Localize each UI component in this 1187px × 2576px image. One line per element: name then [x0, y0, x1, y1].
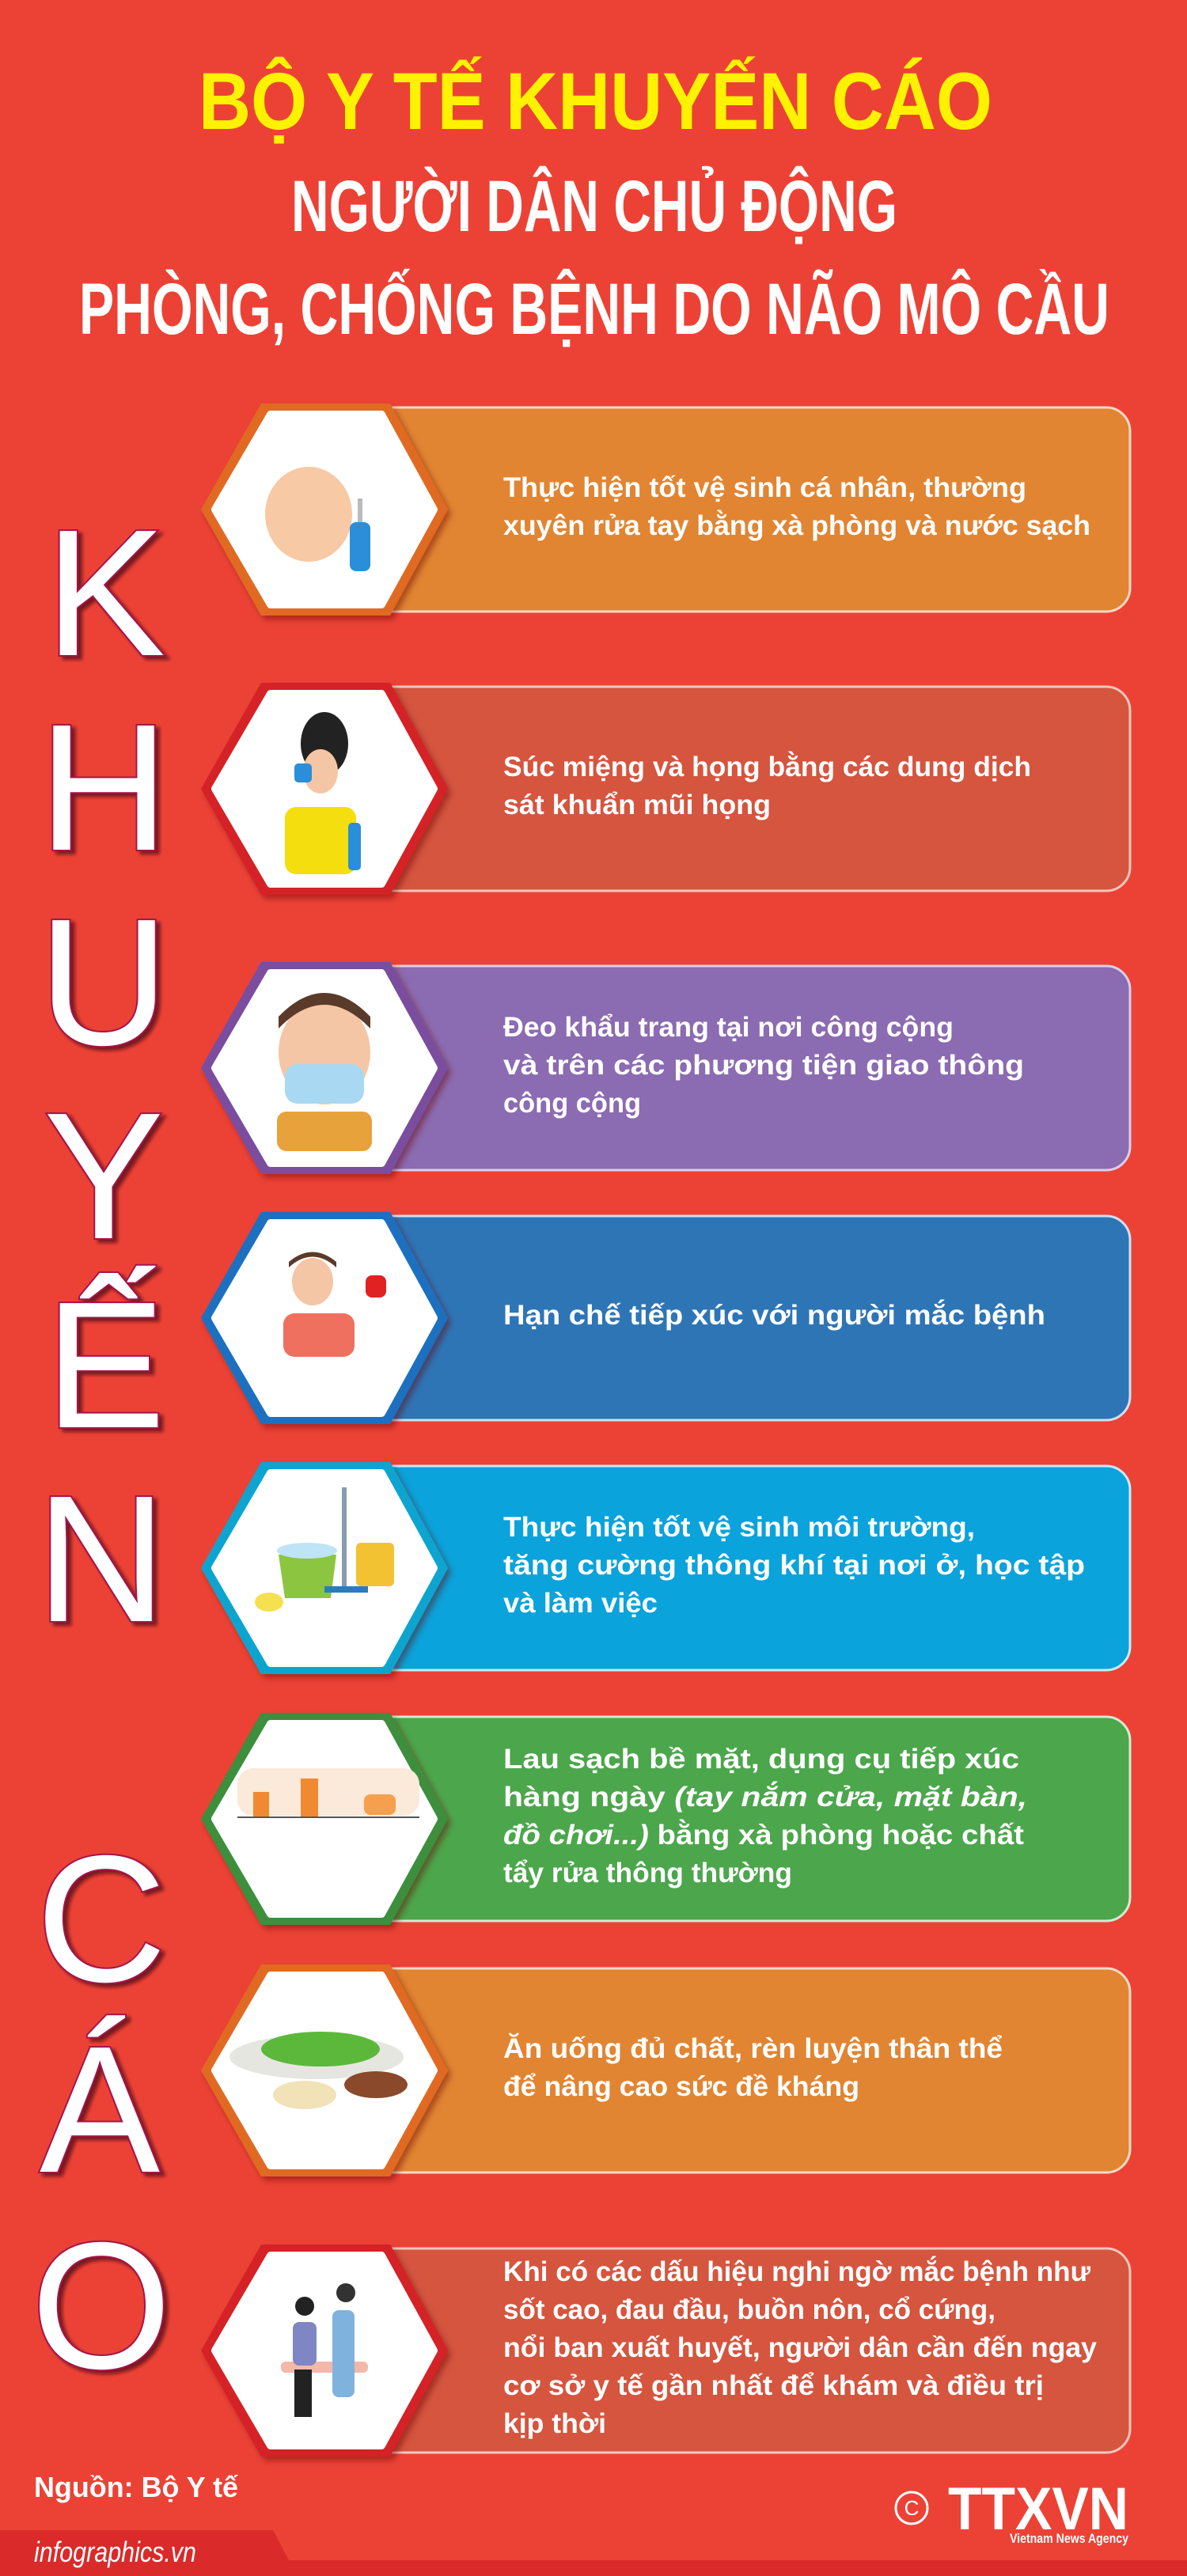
panel 7: nutrition: Ăn uống đủ chất, rèn luyện thân thể	[503, 2033, 1003, 2064]
icon: woman gargling	[201, 683, 448, 895]
vertical word: KHUYẾN CÁO	[31, 493, 172, 2407]
title	[79, 56, 1109, 350]
panel 8: seek medical care	[201, 2245, 1130, 2457]
panel 2: gargle	[201, 683, 1130, 895]
panel 8: seek medical care: sốt cao, đau đầu, buồn nôn, cổ cứng,	[503, 2294, 995, 2325]
panel 8: seek medical care: kịp thời	[503, 2408, 606, 2439]
logo: TTXVN: C	[904, 2496, 919, 2520]
panel 6: clean surfaces: Lau sạch bề mặt, dụng cụ tiếp xúc	[503, 1744, 1019, 1775]
panel 5: environment hygiene	[201, 1462, 1130, 1674]
panel 4: limit contact	[201, 1212, 1130, 1424]
vertical word: KHUYẾN CÁO: N	[36, 1459, 166, 1660]
panel 5: environment hygiene: tăng cường thông khí tại nơi ở, học tập	[503, 1550, 1085, 1581]
panel 1: hand washing: Thực hiện tốt vệ sinh cá nhân, thường	[503, 472, 1026, 503]
vertical word: KHUYẾN CÁO: Ế	[45, 1265, 165, 1466]
panel 6: clean surfaces: tẩy rửa thông thường	[503, 1858, 792, 1888]
logo: TTXVN: TTXVN	[948, 2476, 1128, 2543]
panel 3: mask: công cộng	[503, 1088, 641, 1119]
panel 5: environment hygiene: và làm việc	[503, 1588, 658, 1619]
website: infographics.vn	[34, 2536, 196, 2568]
panel 3: mask: Đeo khẩu trang tại nơi công cộng	[503, 1012, 954, 1043]
icon: food plates	[201, 1964, 448, 2176]
panel 6: clean surfaces	[201, 1713, 1130, 1925]
panel 3: mask: và trên các phương tiện giao thông	[503, 1050, 1024, 1081]
icon: man wearing mask	[201, 962, 448, 1174]
icon: doctor and patient	[201, 2245, 448, 2457]
vertical word: KHUYẾN CÁO: U	[39, 882, 169, 1083]
panel 7: nutrition: để nâng cao sức đề kháng	[503, 2071, 859, 2102]
panel 7: nutrition	[201, 1964, 1130, 2176]
vertical word: KHUYẾN CÁO: Y	[44, 1076, 164, 1277]
vertical word: KHUYẾN CÁO: O	[31, 2206, 172, 2407]
panel 6: clean surfaces: đồ chơi...) bằng xà phòng hoặc chất	[503, 1819, 1024, 1851]
icon: family cleaning	[201, 1713, 448, 1925]
title: BỘ Y TẾ KHUYẾN CÁO	[199, 56, 992, 146]
vertical word: KHUYẾN CÁO: H	[39, 688, 169, 888]
icon: cleaning supplies	[201, 1462, 448, 1674]
panel 1: hand washing: xuyên rửa tay bằng xà phòng và nước sạch	[503, 510, 1090, 541]
icon: sick person and stop hand	[201, 1212, 448, 1424]
vertical word: KHUYẾN CÁO: K	[45, 493, 165, 694]
panel 8: seek medical care: cơ sở y tế gần nhất để khám và điều trị	[503, 2370, 1044, 2401]
panel 8: seek medical care: nổi ban xuất huyết, người dân cần đến ngay	[503, 2332, 1098, 2363]
title: NGƯỜI DÂN CHỦ ĐỘNG	[291, 165, 897, 247]
source: Nguồn: Bộ Y tế	[34, 2471, 239, 2503]
panel 5: environment hygiene: Thực hiện tốt vệ sinh môi trường,	[503, 1512, 975, 1543]
panel 2: gargle: Súc miệng và họng bằng các dung dịch	[503, 751, 1031, 782]
panel 8: seek medical care: Khi có các dấu hiệu nghi ngờ mắc bệnh như	[503, 2256, 1091, 2287]
panel 3: mask	[201, 962, 1130, 1174]
footer band	[0, 2530, 1187, 2576]
vertical word: KHUYẾN CÁO: C	[36, 1819, 166, 2020]
vertical word: KHUYẾN CÁO: Á	[40, 2010, 160, 2210]
icon: hands and soap	[201, 403, 448, 616]
logo: TTXVN	[896, 2476, 1128, 2546]
logo: TTXVN: Vietnam News Agency	[1010, 2531, 1128, 2546]
panel 6: clean surfaces: hàng ngày (tay nắm cửa, mặt bàn,	[503, 1781, 1027, 1813]
panel 4: limit contact: Hạn chế tiếp xúc với người mắc bệnh	[503, 1299, 1045, 1331]
panel 1: hand washing	[201, 403, 1130, 616]
panel 2: gargle: sát khuẩn mũi họng	[503, 790, 771, 820]
